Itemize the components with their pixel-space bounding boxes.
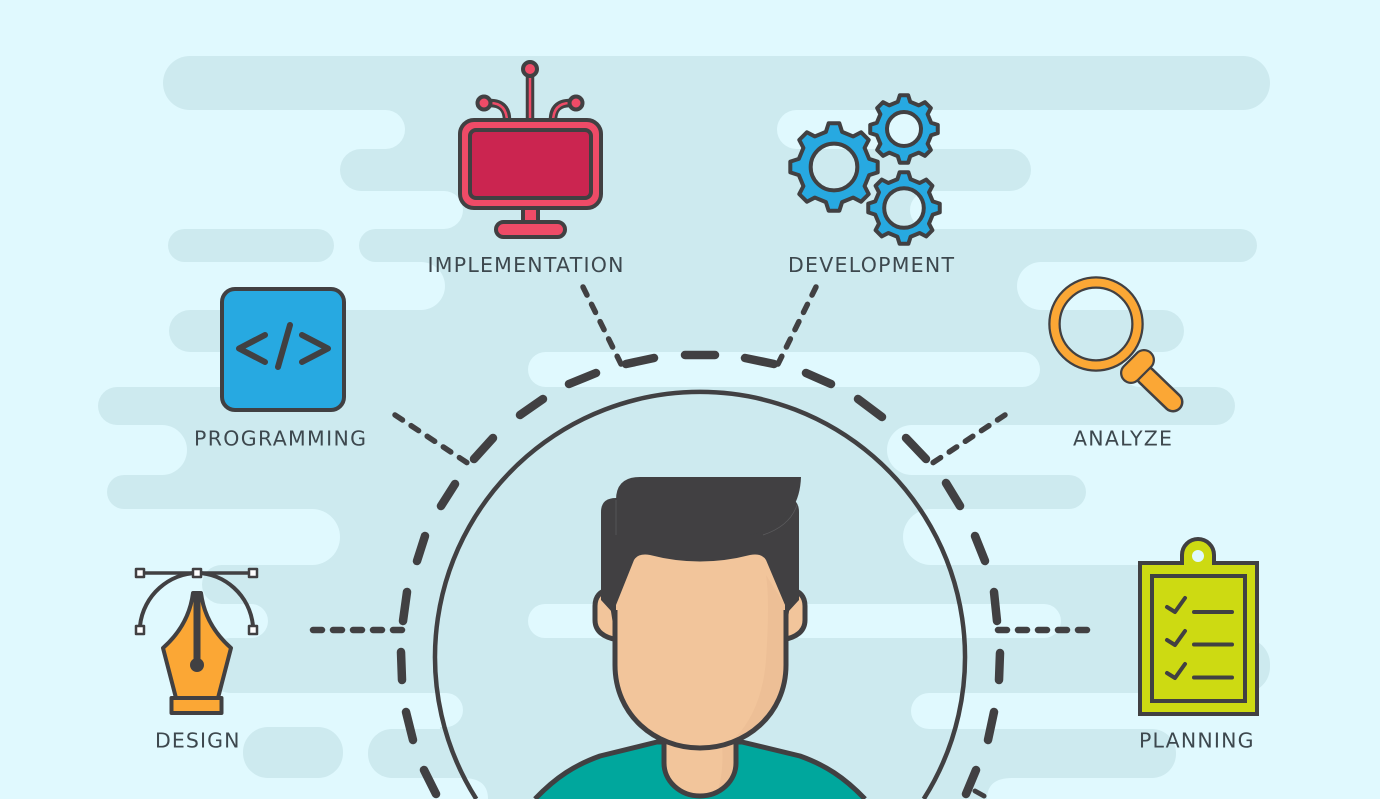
shirt (535, 742, 865, 799)
dashed outer ring (401, 355, 1000, 794)
label: programming: PROGRAMMING (194, 426, 366, 450)
left ear (595, 589, 618, 640)
face (615, 555, 786, 748)
person avatar (535, 477, 865, 799)
inner solid circle (435, 392, 965, 799)
hair (601, 477, 801, 612)
icon: analyze magnifier (1054, 282, 1173, 402)
label: implementation: IMPLEMENTATION (428, 253, 624, 277)
label: planning: PLANNING (1139, 728, 1254, 752)
label: design: DESIGN (155, 728, 240, 752)
icon: planning clipboard (1140, 539, 1257, 714)
label: development: DEVELOPMENT (788, 253, 954, 277)
neck (664, 735, 736, 796)
icon: design pen tool (136, 569, 257, 713)
icon: programming code (222, 289, 344, 410)
label: analyze: ANALYZE (1073, 426, 1172, 450)
dashed connectors (313, 287, 1087, 796)
icon: development gears (790, 95, 940, 244)
icon: implementation monitor (460, 62, 601, 237)
right ear (782, 589, 805, 640)
